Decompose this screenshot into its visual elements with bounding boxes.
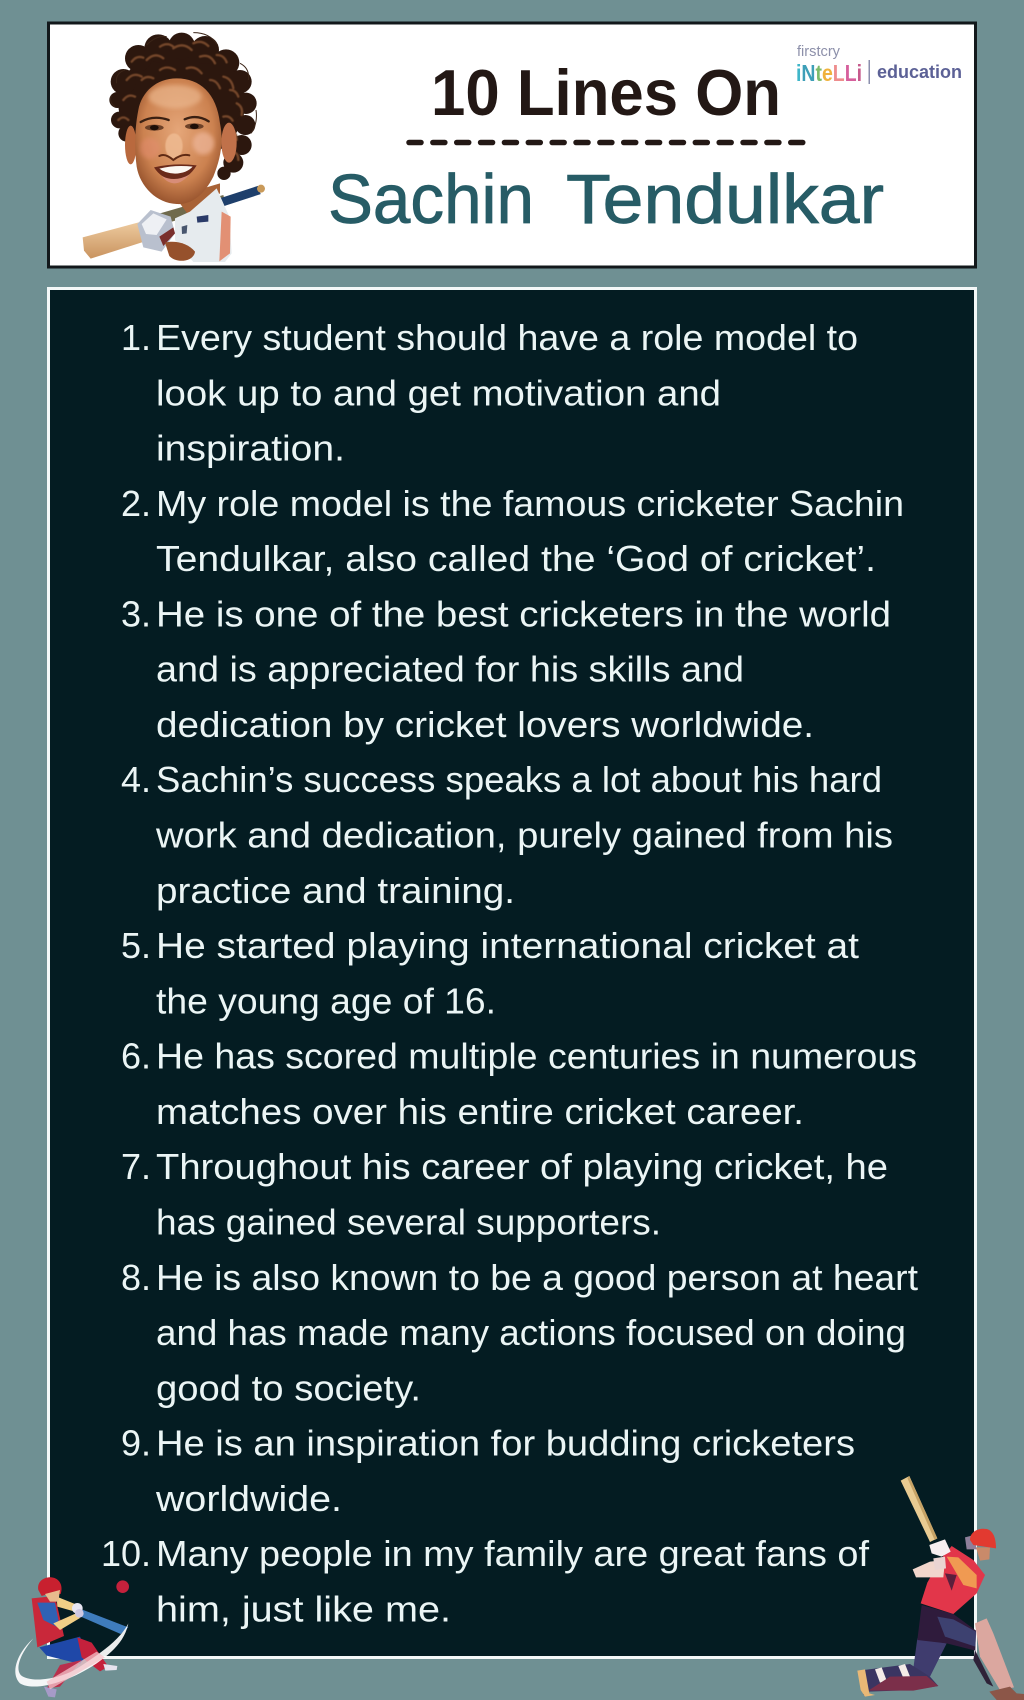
list item 6: matches over his entire cricket career. (156, 1091, 804, 1132)
list item 1: Every student should have a role model to (156, 317, 858, 358)
logo: FirstCry Intelli education: firstcry (797, 43, 840, 60)
list item 10 (101, 1533, 870, 1629)
illustration: batsman bottom right (857, 1476, 1024, 1700)
face (135, 78, 222, 204)
list item 4: practice and training. (156, 870, 515, 911)
list item 5: the young age of 16. (156, 980, 496, 1021)
list item 6: 6. (121, 1036, 151, 1077)
list item 10: 10. (101, 1533, 151, 1574)
list item 1 (121, 317, 858, 469)
list item 2: My role model is the famous cricketer Sachin (156, 483, 904, 524)
list item 2: 2. (121, 483, 151, 524)
eyebrows (141, 117, 209, 122)
helmet (38, 1577, 62, 1596)
bat (901, 1476, 937, 1542)
list item 8: 8. (121, 1257, 151, 1298)
list item 8 (121, 1257, 918, 1408)
arms (57, 1597, 75, 1611)
front pad (975, 1618, 1014, 1690)
subtitle: Sachin Tendulkar (328, 160, 884, 238)
nose (165, 133, 183, 159)
logo: FirstCry Intelli education: iNteLLi (796, 60, 862, 86)
bat (83, 185, 265, 259)
subtitle: Sachin Tendulkar: Tendulkar (566, 160, 884, 238)
glove (137, 210, 175, 252)
list item 3: 3. (121, 593, 151, 634)
eyes (145, 125, 164, 131)
legs (39, 1637, 87, 1664)
list item 8: good to society. (156, 1367, 421, 1408)
list item 9: He is an inspiration for budding cricketers (156, 1423, 855, 1464)
list item 3: He is one of the best cricketers in the world (156, 593, 891, 634)
subtitle: Sachin Tendulkar: Sachin (328, 160, 534, 238)
title: 10 Lines On: 10 Lines On (431, 56, 781, 129)
list item 9: 9. (121, 1423, 151, 1464)
list item 2 (121, 483, 904, 579)
list item 4: 4. (121, 759, 151, 800)
list item 7: 7. (121, 1146, 151, 1187)
list item 9: worldwide. (155, 1478, 342, 1519)
logo: FirstCry Intelli education: education (877, 62, 962, 82)
list item 5: He started playing international cricket at (156, 925, 859, 966)
gloves (929, 1539, 951, 1557)
list item 7: has gained several supporters. (156, 1202, 661, 1242)
list item 7: Throughout his career of playing cricket, he (156, 1146, 888, 1187)
shirt (32, 1596, 64, 1647)
list item 3: and is appreciated for his skills and (156, 649, 744, 690)
gloves (72, 1603, 83, 1614)
front shoe (989, 1687, 1024, 1700)
thigh (917, 1605, 976, 1651)
smile (154, 164, 197, 180)
content panel (48, 288, 976, 1658)
hair (109, 33, 257, 180)
list item 10: Many people in my family are great fans of (156, 1533, 870, 1574)
list item 6 (121, 1036, 917, 1132)
list item 8: and has made many actions focused on doing (156, 1312, 906, 1353)
logo: FirstCry Intelli education (796, 43, 962, 86)
list item 5: 5. (121, 925, 151, 966)
list item 6: He has scored multiple centuries in numerous (156, 1036, 917, 1077)
ball (116, 1580, 129, 1593)
list item 1: inspiration. (156, 428, 345, 469)
illustration: batsman bottom left (15, 1577, 129, 1697)
bat (79, 1609, 128, 1634)
list item 4: work and dedication, purely gained from his (155, 814, 893, 856)
helmet and face (965, 1535, 977, 1549)
shirt (921, 1546, 985, 1614)
list item 8: He is also known to be a good person at heart (156, 1257, 918, 1298)
back leg and shoe (913, 1638, 947, 1677)
swoosh (15, 1623, 128, 1687)
list item 5 (121, 925, 859, 1021)
list item 7 (121, 1146, 888, 1242)
arms (947, 1557, 977, 1588)
neck (175, 183, 220, 215)
list item 10: him, just like me. (156, 1588, 451, 1629)
list item 3: dedication by cricket lovers worldwide. (156, 704, 814, 745)
shirt (175, 188, 232, 262)
list item 1: look up to and get motivation and (156, 372, 721, 413)
list item 3 (121, 593, 891, 745)
list item 1: 1. (121, 317, 151, 358)
list item 2: Tendulkar, also called the ‘God of cricket’. (156, 538, 876, 579)
list item 4: Sachin’s success speaks a lot about his hard (156, 759, 882, 800)
dashed divider (409, 140, 806, 145)
list item 9 (121, 1423, 855, 1519)
list item 4 (121, 759, 893, 911)
portrait: Sachin Tendulkar caricature (83, 33, 265, 262)
header panel (48, 23, 976, 267)
forearm (165, 242, 195, 261)
ears (125, 126, 136, 164)
